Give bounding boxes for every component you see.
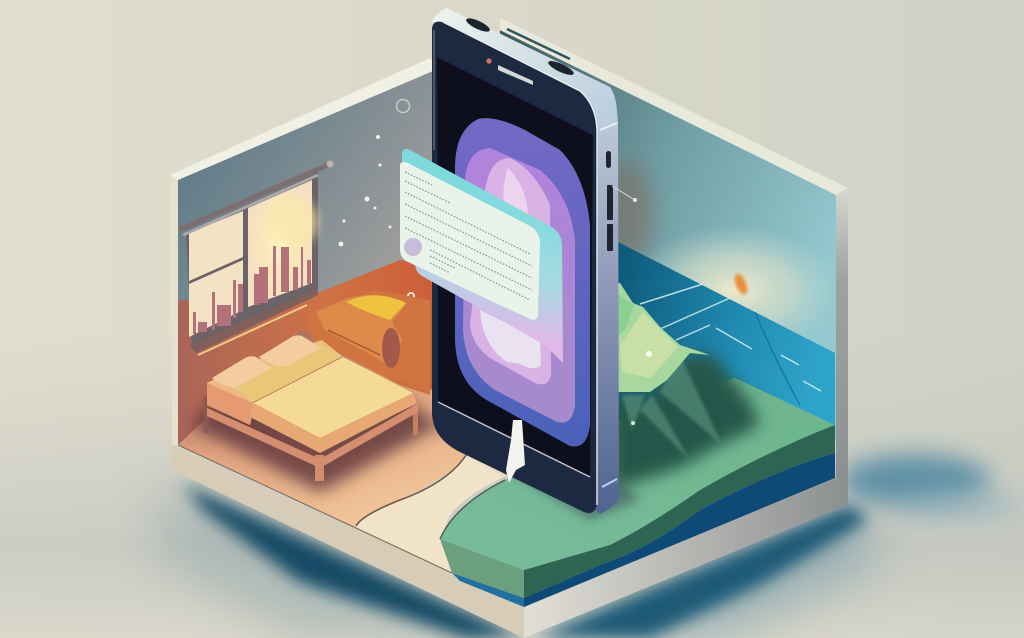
panel: green land	[440, 378, 835, 607]
cable	[506, 420, 525, 483]
panel: window	[181, 160, 334, 355]
phone top face	[432, 8, 617, 133]
land navy stratum	[524, 453, 835, 607]
middle purple layer	[463, 148, 575, 423]
floor shadow	[190, 385, 440, 492]
card fingerprint icon	[404, 238, 422, 256]
sparkles	[339, 100, 414, 299]
mattress top	[253, 357, 413, 438]
mountain peak	[612, 283, 710, 392]
panel: mountain	[610, 283, 760, 485]
wall right edge	[836, 188, 848, 490]
base right face	[524, 478, 848, 638]
land blue left	[452, 573, 524, 607]
cream floor	[356, 440, 520, 573]
mountain rays	[622, 355, 722, 460]
bed frame	[207, 403, 419, 468]
panel: cabinet with cushion	[311, 290, 430, 395]
phone shadow	[432, 420, 640, 520]
curtain rod	[181, 164, 330, 229]
water highlights	[640, 284, 821, 391]
pillow left	[212, 356, 272, 388]
panel: landscape right wall	[500, 18, 848, 490]
left pane	[189, 211, 243, 337]
wall left edge	[170, 175, 178, 445]
pillow right	[259, 335, 321, 367]
cushion	[316, 295, 407, 368]
top camera slots	[465, 16, 491, 34]
card text lines	[405, 172, 532, 300]
warm shading near phone	[597, 160, 653, 270]
panel: smartphone	[432, 8, 640, 520]
window frame	[186, 172, 318, 350]
cushion end	[382, 328, 400, 368]
right pane	[248, 180, 312, 307]
side highlight bands	[600, 123, 617, 130]
orange lower wall	[177, 260, 445, 470]
base left face	[172, 445, 524, 638]
screen bottom line	[438, 402, 590, 477]
pink layer	[470, 158, 551, 384]
window sill	[190, 288, 318, 353]
panel: floor	[178, 330, 520, 573]
phone side	[596, 100, 619, 514]
outer purple layer	[455, 118, 590, 447]
white blob	[480, 310, 541, 368]
sheet	[207, 340, 343, 425]
phone front	[432, 22, 597, 513]
sun	[732, 272, 750, 296]
window dividers	[243, 206, 248, 312]
phone edge highlights	[443, 22, 597, 505]
floor curve lines	[356, 452, 468, 526]
land front left	[440, 539, 524, 598]
speaker	[498, 65, 533, 85]
water	[618, 242, 835, 440]
floor edge	[178, 445, 452, 573]
horizon glow	[630, 225, 840, 355]
land dark stratum	[524, 425, 835, 598]
front white card	[400, 162, 540, 320]
pink leaf	[503, 168, 528, 225]
panel: floating card	[400, 149, 563, 363]
land top	[440, 378, 835, 570]
back card	[402, 149, 563, 363]
sun in window	[266, 196, 318, 248]
screen	[437, 57, 593, 477]
wall top band	[500, 18, 848, 195]
panel: bedroom left wall	[170, 58, 445, 470]
mountain shadow body	[610, 353, 760, 485]
front camera	[486, 58, 492, 64]
cushion yellow	[346, 295, 406, 320]
panel: bed	[190, 335, 440, 492]
side buttons	[606, 151, 613, 251]
bed legs	[315, 455, 324, 481]
panel: base slab	[172, 445, 848, 638]
mattress side	[252, 393, 417, 453]
land edge line	[440, 480, 505, 539]
skyline	[193, 246, 311, 334]
cast shadows	[160, 454, 1020, 638]
wall top band	[170, 58, 440, 180]
